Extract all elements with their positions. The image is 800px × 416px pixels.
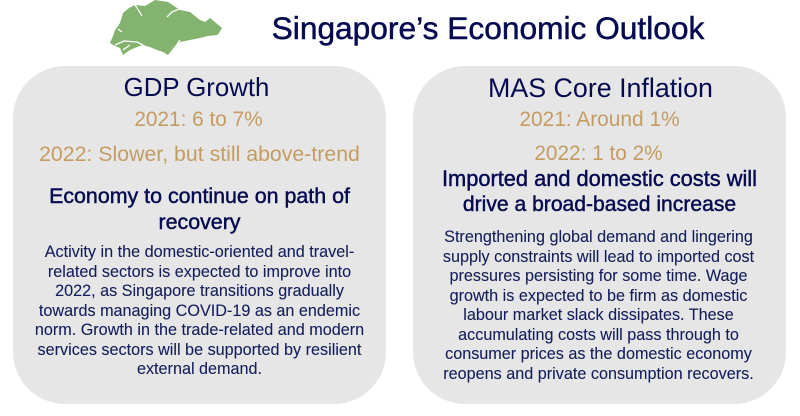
body text: growth is expected to be firm as domestic xyxy=(450,286,747,304)
body text: services sectors will be supported by resilient xyxy=(38,340,361,358)
heading: MAS Core Inflation: MAS Core Inflation xyxy=(488,73,713,103)
heading: GDP Growth: GDP Growth xyxy=(124,74,269,102)
body text: towards managing COVID-19 as an endemic xyxy=(39,302,360,320)
body text: related sectors is expected to improve into xyxy=(48,262,351,280)
subheading xyxy=(49,184,350,234)
subheading: Imported and domestic costs will xyxy=(442,166,757,191)
body text: reopens and private consumption recovers. xyxy=(443,364,754,382)
title: Singapore’s Economic Outlook xyxy=(272,10,704,46)
body text: Activity in the domestic-oriented and travel- xyxy=(45,243,354,261)
body text xyxy=(443,228,754,382)
body text: norm. Growth in the trade-related and modern xyxy=(35,321,364,339)
body text: Strengthening global demand and lingering xyxy=(444,228,753,246)
body text xyxy=(35,243,364,378)
panel: GDP growth xyxy=(13,66,386,404)
body text: pressures persisting for some time. Wage xyxy=(449,267,748,285)
forecast 2021: 2021: Around 1% xyxy=(519,108,680,131)
subheading: recovery xyxy=(158,210,241,234)
body text: consumer prices as the domestic economy xyxy=(445,345,752,363)
icon: Singapore map xyxy=(110,0,222,55)
panel: MAS core inflation xyxy=(413,66,786,404)
body text: supply constraints will lead to imported cost xyxy=(443,248,754,266)
body text: labour market slack dissipates. These xyxy=(463,306,734,324)
subheading: Economy to continue on path of xyxy=(49,184,350,208)
forecast 2021: 2021: 6 to 7% xyxy=(134,108,263,131)
body text: 2022, as Singapore transitions gradually xyxy=(55,282,344,300)
body text: accumulating costs will pass through to xyxy=(458,326,739,344)
forecast 2022: 2022: Slower, but still above-trend xyxy=(39,142,360,166)
subheading xyxy=(442,166,757,216)
forecast 2022: 2022: 1 to 2% xyxy=(534,142,663,165)
subheading: drive a broad-based increase xyxy=(463,193,736,216)
body text: external demand. xyxy=(137,360,262,378)
